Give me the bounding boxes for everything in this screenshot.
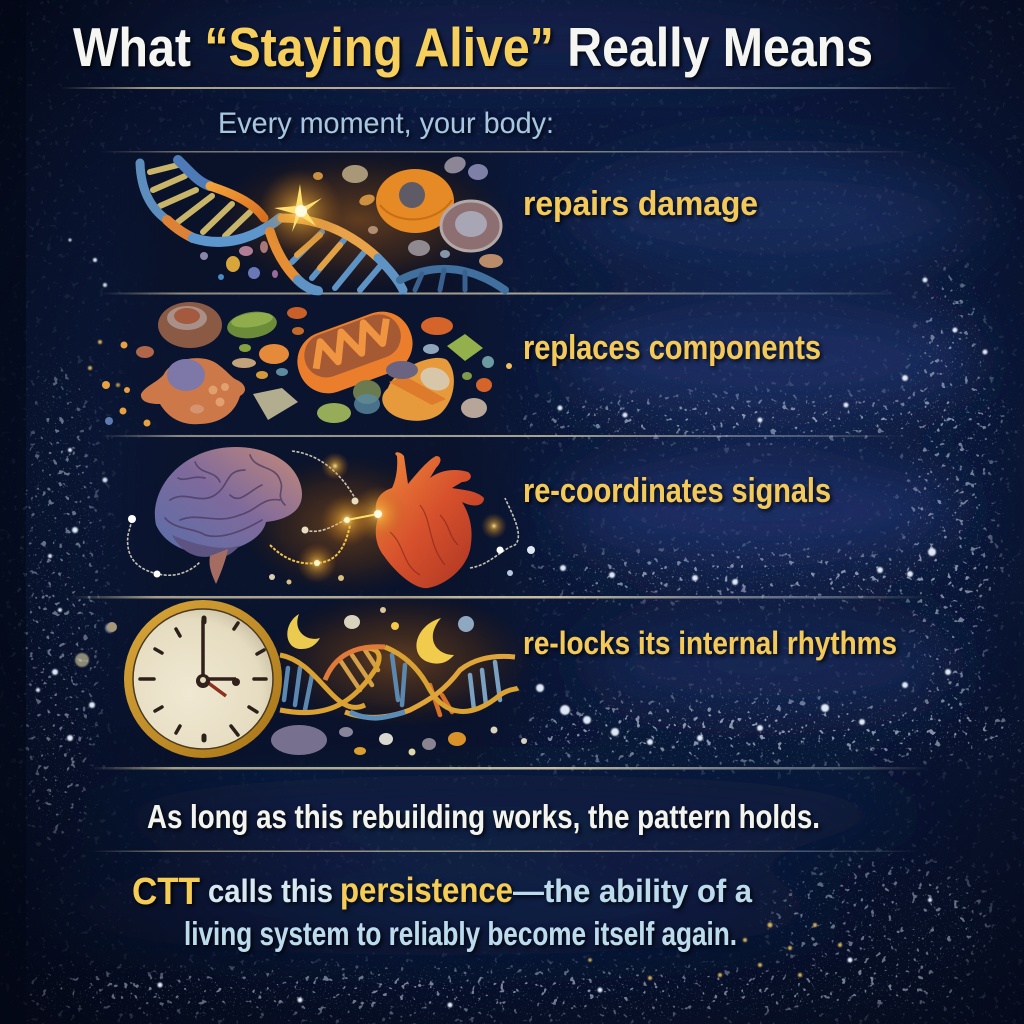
icon: grey cell bbox=[441, 201, 501, 251]
icon: spark nodes bbox=[128, 452, 535, 584]
conclusion line 1: —the ability of a bbox=[513, 873, 752, 909]
title: What “Staying Alive” Really Means bbox=[73, 16, 873, 78]
conclusion line 2: living system to reliably become itself again. bbox=[184, 915, 737, 952]
icon: green capsule bbox=[225, 309, 279, 341]
star field: bright accent stars bbox=[36, 238, 988, 1008]
icon: cut orange disc bbox=[382, 358, 454, 421]
panel: replaces components bbox=[100, 295, 530, 434]
row label: re-locks its internal rhythms: re-locks its internal rhythms bbox=[523, 625, 897, 661]
warm glow bbox=[265, 592, 535, 728]
row label: repairs damage: repairs damage bbox=[523, 185, 758, 223]
icon: orange cell bbox=[376, 169, 454, 233]
panel backdrop bbox=[100, 600, 540, 765]
icon: orange cell with nucleus bbox=[141, 358, 245, 424]
row label: re-coordinates signals: re-coordinates signals bbox=[523, 472, 831, 510]
icon: helix with clock rhythm bbox=[280, 647, 518, 718]
divider rules bbox=[60, 87, 960, 852]
icon: brown disc bbox=[158, 302, 222, 348]
icon: left crescent moon bbox=[287, 614, 320, 649]
icon: right crescent moon bbox=[416, 618, 454, 664]
icon: heart bbox=[376, 452, 484, 588]
panel backdrop bbox=[100, 438, 540, 595]
warm signal glow bbox=[240, 455, 450, 595]
icon: clock bbox=[124, 600, 282, 758]
conclusion line 1: persistence bbox=[340, 871, 513, 910]
warm glow bbox=[210, 148, 510, 292]
gold stars near lower text bbox=[88, 340, 842, 980]
panel backdrop bbox=[100, 295, 530, 434]
icon: brain bbox=[155, 447, 302, 584]
subheading: Every moment, your body: bbox=[218, 107, 554, 140]
conclusion line 1: calls this bbox=[208, 873, 333, 909]
small rocks and stars bbox=[107, 607, 527, 756]
signal network lines bbox=[128, 451, 518, 575]
small debris particles bbox=[200, 154, 503, 280]
panel: repairs damage bbox=[100, 148, 525, 292]
small component particles bbox=[102, 307, 512, 426]
conclusion line 1: CTT bbox=[132, 871, 200, 913]
panel backdrop bbox=[100, 153, 525, 292]
panel: re-coordinates signals bbox=[100, 438, 540, 595]
statement: pattern holds: As long as this rebuilding works, the pattern holds. bbox=[147, 798, 820, 835]
icon: spark bbox=[258, 169, 342, 253]
icon: mitochondrion bbox=[289, 303, 421, 402]
row label: replaces components: replaces components bbox=[523, 329, 821, 367]
conclusion line 1 bbox=[132, 871, 752, 913]
illustration: broken DNA helix bbox=[140, 160, 505, 291]
panel: re-locks rhythms bbox=[100, 592, 540, 765]
